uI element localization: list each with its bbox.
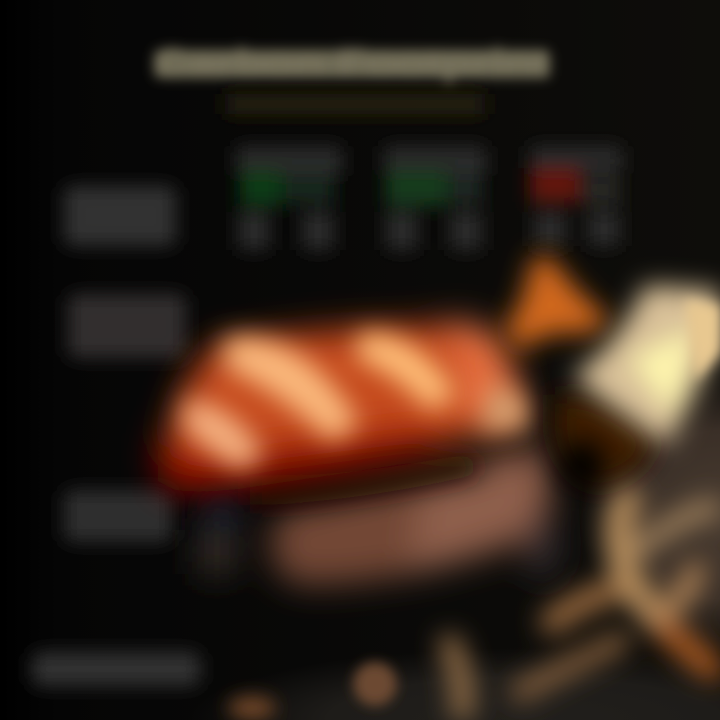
row label two	[68, 294, 186, 358]
salmon tail	[505, 254, 610, 352]
subtitle: Nutrition comparison	[225, 94, 485, 114]
column: first, green	[236, 146, 342, 250]
footer label	[32, 652, 200, 686]
shadow under salmon	[250, 452, 480, 505]
bread right edge	[685, 300, 720, 380]
row label three	[64, 490, 172, 542]
row label one	[64, 186, 176, 246]
title: Carbon Footprint	[154, 41, 550, 85]
noodles garnish	[450, 500, 712, 710]
column: second, green	[384, 146, 486, 250]
column: third, red	[530, 146, 622, 246]
crumb	[353, 662, 397, 706]
salmon right section	[440, 322, 518, 425]
crumb lower	[228, 696, 276, 720]
dark board floor	[160, 600, 720, 720]
bread face	[572, 285, 720, 445]
salmon pale stripes	[183, 333, 530, 470]
dark board side	[580, 375, 720, 655]
salmon dark red underside	[158, 425, 450, 492]
bread crust	[555, 395, 655, 485]
subtitle	[225, 94, 485, 114]
bread dark gap	[560, 441, 604, 489]
bread piece	[555, 285, 720, 489]
steak	[200, 445, 556, 585]
salmon fillet	[158, 322, 521, 492]
